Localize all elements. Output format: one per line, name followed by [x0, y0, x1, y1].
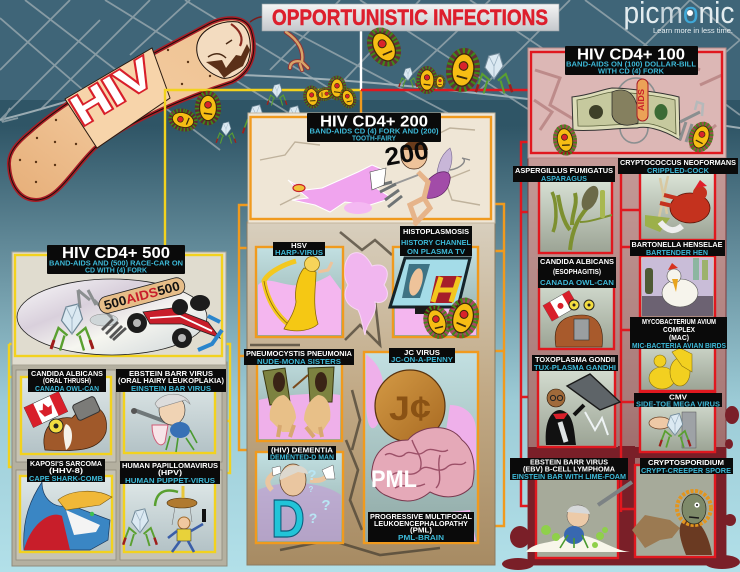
box: Ebstein Barr hairy leukoplakia: [116, 369, 226, 453]
box: Human papillomavirus: [120, 461, 220, 552]
CD disc: [17, 279, 207, 355]
bandage perforation dots: [19, 49, 211, 183]
label: MIC-BACTERIA AVIAN BIRDS: [632, 341, 726, 350]
fork: [78, 290, 126, 340]
box: Kaposi sarcoma: [20, 459, 112, 552]
box: HIV dementia: [256, 446, 343, 549]
label: CRYPTOCOCCUS NEOFORMANS: [620, 158, 736, 167]
heading: CD4 200: TOOTH-FAIRY: [352, 134, 396, 142]
demented D man: ?: [307, 467, 317, 484]
label: COMPLEX: [663, 325, 695, 334]
middle red connector: [621, 153, 640, 512]
upper sky band: [0, 0, 740, 100]
heading: CD4 200: HIV CD4+ 200: [320, 114, 428, 130]
crypt creeper spore: [632, 491, 712, 555]
label: ON PLASMA TV: [407, 247, 466, 256]
inner stone slabs: [16, 370, 222, 560]
label PML: (PML): [410, 526, 432, 534]
dark red splatter: [502, 406, 740, 570]
stone base of 500 panel: [12, 362, 227, 566]
wall cracks: [250, 232, 440, 555]
main frame 500: [12, 252, 226, 365]
chain-link fence: [0, 0, 740, 150]
red connector: [361, 90, 539, 506]
heading: CD4 500: HIV CD4+ 500: [62, 245, 170, 262]
label: (ORAL HAIRY LEUKOPLAKIA): [118, 376, 224, 385]
label: CANDIDA ALBICANS: [540, 257, 614, 266]
orange connector: [239, 90, 504, 526]
label: [27, 459, 105, 483]
main frame 100: [528, 48, 726, 158]
box: MAC: [630, 317, 727, 391]
label: HSV: [291, 241, 308, 250]
box: EBV lymphoma: [510, 458, 632, 558]
Einstein with lime foam: [526, 482, 632, 552]
label: [640, 458, 733, 475]
tux Gandhi and shattered plasma: [546, 374, 620, 445]
label: [400, 226, 472, 256]
label JC: JC VIRUS: [404, 348, 440, 357]
label: (HPV): [158, 468, 183, 477]
label: [618, 158, 738, 175]
label: [244, 349, 354, 366]
heading: CD4 100: HIV CD4+ 100: [577, 46, 685, 64]
demented D man: ?: [321, 497, 331, 514]
label: ASPERGILLUS FUMIGATUS: [515, 166, 613, 175]
label: HISTORY CHANNEL: [401, 238, 471, 247]
demented D man: ?: [309, 510, 317, 526]
owl with can: [44, 396, 107, 451]
label: CRIPPLED-COCK: [647, 166, 709, 175]
box: Pneumocystis pneumonia: [244, 349, 354, 441]
label: [634, 392, 722, 408]
box: Candida oral thrush: [21, 369, 111, 454]
label: (MAC): [669, 333, 689, 342]
label: [630, 240, 725, 257]
label: NUDE-MONA SISTERS: [257, 357, 341, 366]
box: JC virus PML: [364, 348, 478, 543]
puppet virus: [123, 486, 206, 552]
penny: J¢: [389, 390, 431, 428]
box: Cryptosporidium: [632, 458, 733, 557]
label PML: [368, 512, 474, 542]
heading: CD4 200: BAND-AIDS CD (4) FORK AND (200): [310, 126, 439, 136]
harp virus: [264, 256, 332, 331]
label: [513, 166, 615, 183]
heading: CD4 100: BAND-AIDS ON (100) DOLLAR-BILL: [566, 60, 696, 68]
plasma tv: [390, 258, 470, 314]
label: [116, 369, 226, 393]
bandage pad: [65, 48, 170, 148]
label: CRYPT-CREEPER SPORE: [641, 466, 731, 475]
label: [630, 317, 727, 350]
pink smoke between boxes: [344, 253, 387, 335]
panel cracks: [260, 128, 480, 205]
heading: CD4 100: WITH CD (4) FORK: [598, 66, 664, 76]
label: EBSTEIN BARR VIRUS: [530, 458, 608, 466]
label: (ESOPHAGITIS): [553, 267, 601, 276]
label: SIDE-TOE MEGA VIRUS: [636, 400, 720, 408]
500 AIDS 500 bandage: 500AIDS500: [102, 278, 181, 313]
label: (ORAL THRUSH): [43, 376, 91, 385]
title plate: OPPORTUNISTIC INFECTIONS: [272, 5, 548, 30]
label: EINSTEIN BAR WITH LIME-FOAM: [512, 472, 626, 481]
label: CANDIDA ALBICANS: [31, 369, 103, 378]
dollar bill: [572, 78, 680, 143]
main frame 200: [248, 113, 495, 223]
bandage arm: [286, 32, 308, 70]
label: TUX-PLASMA GANDHI: [534, 363, 616, 372]
demented D man: ?: [309, 485, 314, 494]
box: Toxoplasma: [532, 355, 620, 447]
demented D man: [268, 464, 335, 549]
label JC: [389, 348, 455, 364]
yellow connector from top: [9, 90, 360, 473]
connector lines: [9, 31, 539, 526]
crippled rooster: [645, 176, 710, 232]
label: MYCOBACTERIUM AVIUM: [642, 317, 716, 326]
label: PNEUMOCYSTIS PNEUMONIA: [246, 349, 352, 358]
bandage body: [9, 18, 254, 200]
label PML: PROGRESSIVE MULTIFOCAL: [370, 512, 472, 521]
box: Cryptococcus: [618, 158, 738, 240]
label: TOXOPLASMA GONDII: [535, 355, 615, 364]
label: (HHV-8): [49, 466, 84, 475]
label: CRYPTOSPORIDIUM: [648, 458, 724, 467]
label: [510, 458, 628, 481]
bandage head and face: [197, 22, 250, 78]
phage on CD: [51, 304, 93, 350]
box: CMV: [634, 392, 722, 452]
label: CAPE SHARK-COMB: [29, 474, 104, 483]
label: (HIV) DEMENTIA: [271, 446, 334, 454]
label: [532, 355, 618, 372]
heading: CD4 100: [565, 46, 698, 76]
shark with cape: [24, 482, 112, 550]
label: KAPOSI'S SARCOMA: [30, 459, 102, 468]
label: CANADA OWL-CAN: [35, 384, 99, 393]
label: [273, 241, 325, 257]
label JC: JC-ON-A-PENNY: [391, 355, 453, 364]
label: (EBV) B-CELL LYMPHOMA: [523, 464, 615, 474]
label PML: LEUKOENCEPHALOPATHY: [374, 519, 468, 528]
label: BARTENDER HEN: [646, 248, 708, 257]
bartender hen: [645, 258, 708, 307]
band-aid HIV character: [9, 17, 308, 200]
label: [538, 257, 616, 288]
label: EINSTEIN BAR VIRUS: [131, 384, 211, 393]
label: HUMAN PAPILLOMAVIRUS: [122, 461, 218, 470]
wall behind 200 sub-panels: [247, 222, 495, 565]
pink comet splash: [288, 165, 392, 214]
panel: CD4 200: [244, 113, 495, 565]
asparagus: [552, 192, 612, 250]
dollar bill: AIDS: [636, 89, 646, 111]
Einstein with bar: [131, 394, 197, 452]
heading: CD4 500: [47, 245, 185, 274]
Mona sisters: [263, 367, 334, 437]
white connector: [360, 31, 362, 90]
panel: CD4 100: [502, 46, 740, 570]
penny: [375, 370, 445, 442]
viruses at bill: [551, 123, 579, 157]
viruses along top connector: [166, 21, 512, 143]
box: Histoplasmosis: [390, 226, 483, 343]
tooth fairy: [370, 140, 470, 225]
viruses at tv: [419, 301, 455, 343]
heading: CD4 200: [307, 113, 441, 142]
label: [268, 446, 336, 462]
200 numerals: 200: [383, 136, 431, 172]
avian birds: [649, 348, 692, 389]
label: HISTOPLASMOSIS: [403, 227, 469, 236]
heading: CD4 500: BAND-AIDS AND (500) RACE-CAR ON: [49, 258, 183, 268]
label: HUMAN PUPPET-VIRUS: [125, 476, 215, 485]
heading: CD4 500: CD WITH (4) FORK: [85, 266, 147, 274]
picmonic logo: Learn more in less time.: [653, 26, 733, 35]
brain: PML: [371, 466, 417, 493]
flag esophagitis: [543, 291, 578, 321]
label: DEMENTED-D MAN: [270, 452, 334, 462]
demented D man: D: [271, 489, 305, 549]
race car: [127, 295, 222, 350]
side toe mega virus: [649, 412, 696, 448]
red wall behind boxes: [528, 155, 726, 565]
label: BARTONELLA HENSELAE: [632, 240, 722, 249]
box: Candida esophagitis: [538, 257, 616, 349]
HIV lettering: HIV: [62, 49, 162, 134]
label: [28, 369, 106, 393]
label: [120, 461, 220, 485]
owl esophagitis: [555, 300, 602, 347]
box: Bartonella: [630, 240, 725, 318]
fork at bill: [680, 102, 703, 142]
label: CANADA OWL-CAN: [540, 278, 614, 287]
box: HSV: [256, 241, 343, 337]
label: CMV: [669, 392, 688, 402]
panel: CD4 500: [12, 245, 227, 566]
Canada flag: [24, 392, 68, 428]
box: Aspergillus: [513, 166, 615, 253]
label PML: PML-BRAIN: [398, 533, 444, 542]
brain: [371, 428, 474, 501]
label: EBSTEIN BARR VIRUS: [129, 369, 213, 378]
label: ASPARAGUS: [541, 174, 587, 183]
label: HARP-VIRUS: [275, 248, 323, 257]
